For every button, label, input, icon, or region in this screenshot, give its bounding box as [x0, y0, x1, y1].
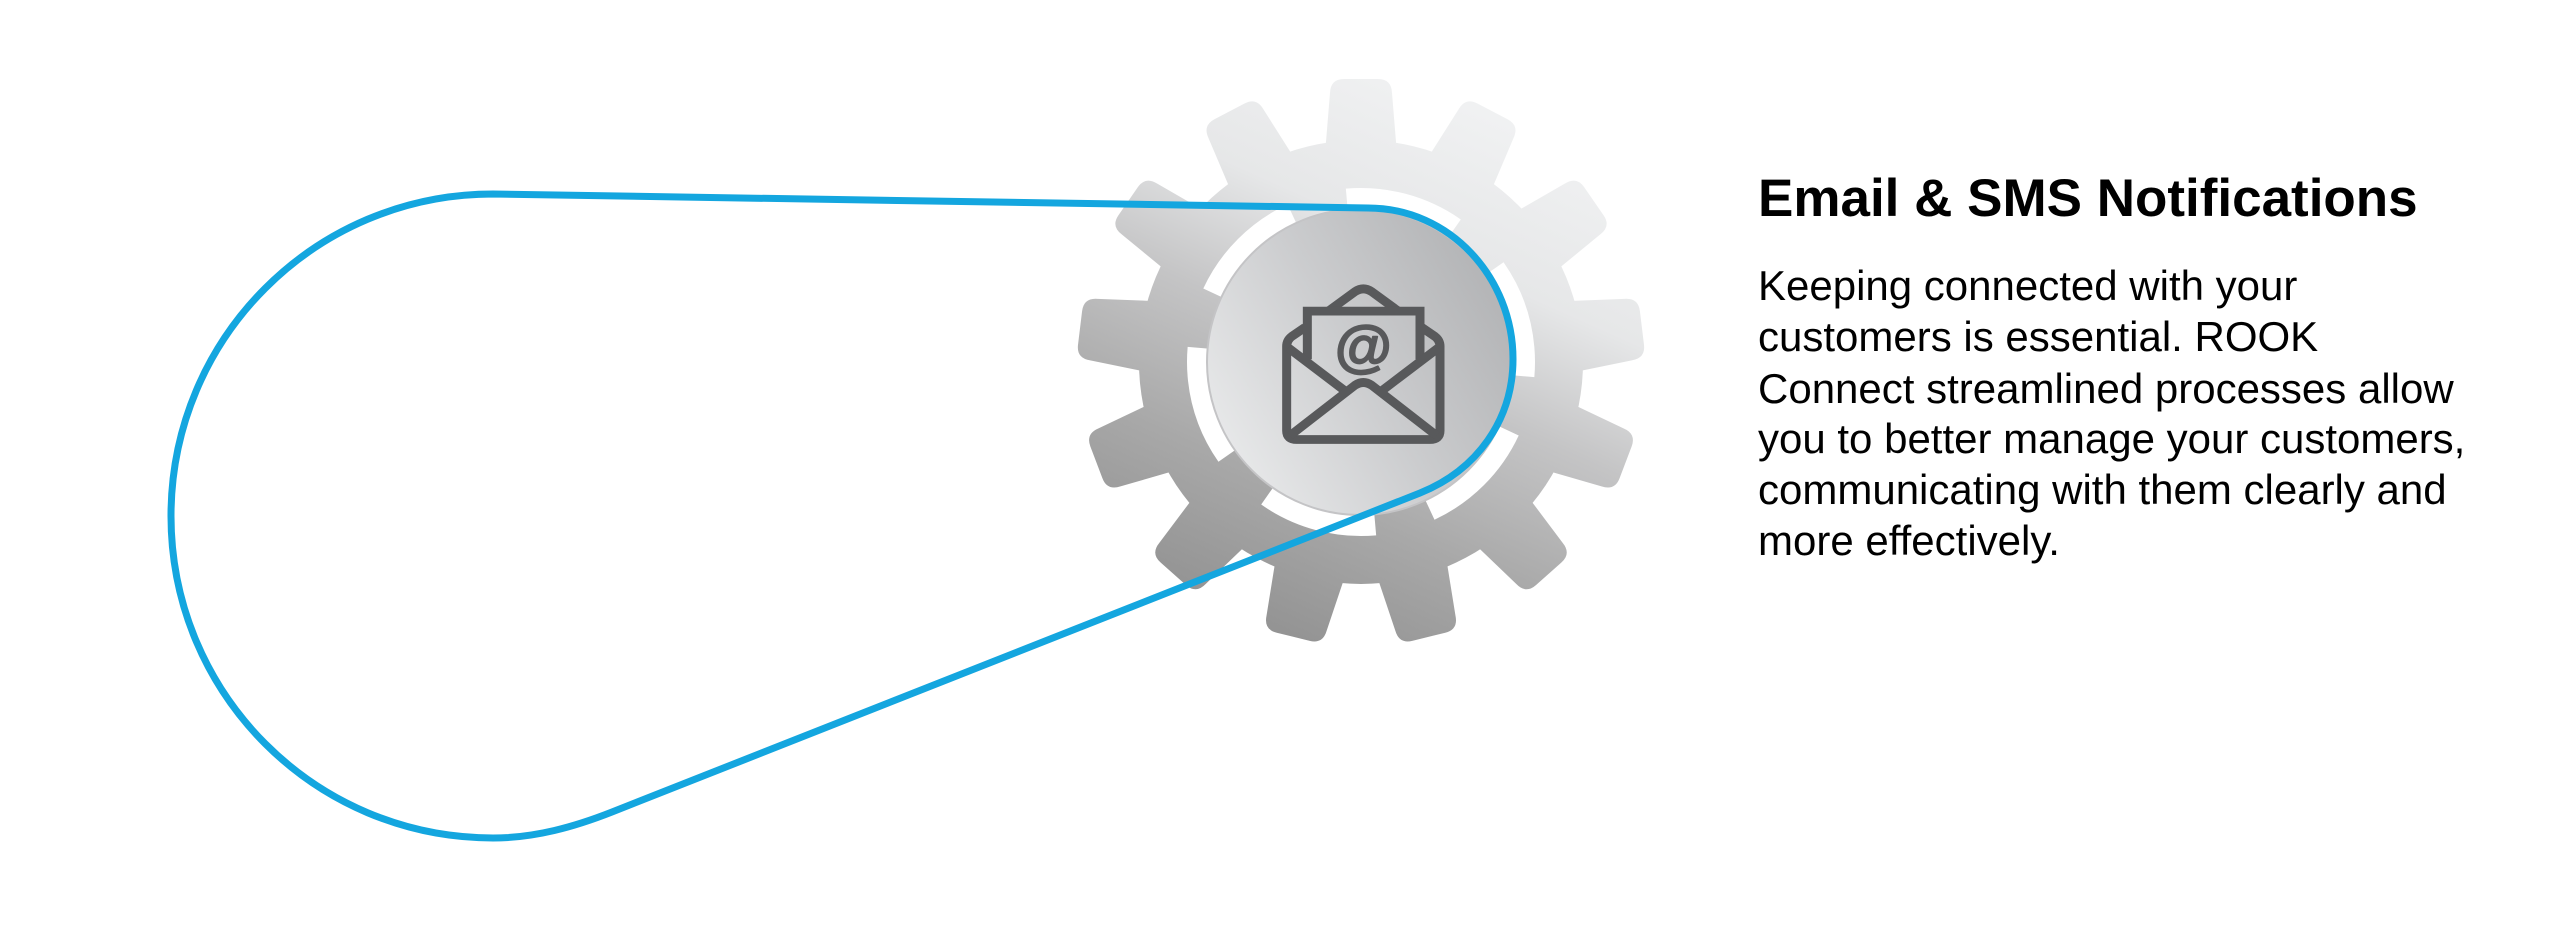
- blue connector loop: [171, 194, 1513, 838]
- body text: Keeping connected with your: [1758, 262, 2297, 309]
- body text: you to better manage your customers,: [1758, 415, 2465, 462]
- body text: more effectively.: [1758, 517, 2060, 564]
- body text: communicating with them clearly and: [1758, 466, 2447, 513]
- gear inner white ring segments: [1188, 189, 1534, 535]
- heading: Email & SMS Notifications: [1758, 169, 2418, 228]
- body text: customers is essential. ROOK: [1758, 313, 2318, 360]
- gear body: [1078, 79, 1644, 642]
- body text: Connect streamlined processes allow: [1758, 365, 2454, 412]
- icon: open envelope with at sign: [1287, 289, 1440, 440]
- icon: open envelope with at sign: @: [1335, 315, 1392, 379]
- icon: gear with envelope: [1078, 79, 1644, 642]
- gear hub: [1207, 209, 1513, 515]
- body text: [1758, 262, 2465, 564]
